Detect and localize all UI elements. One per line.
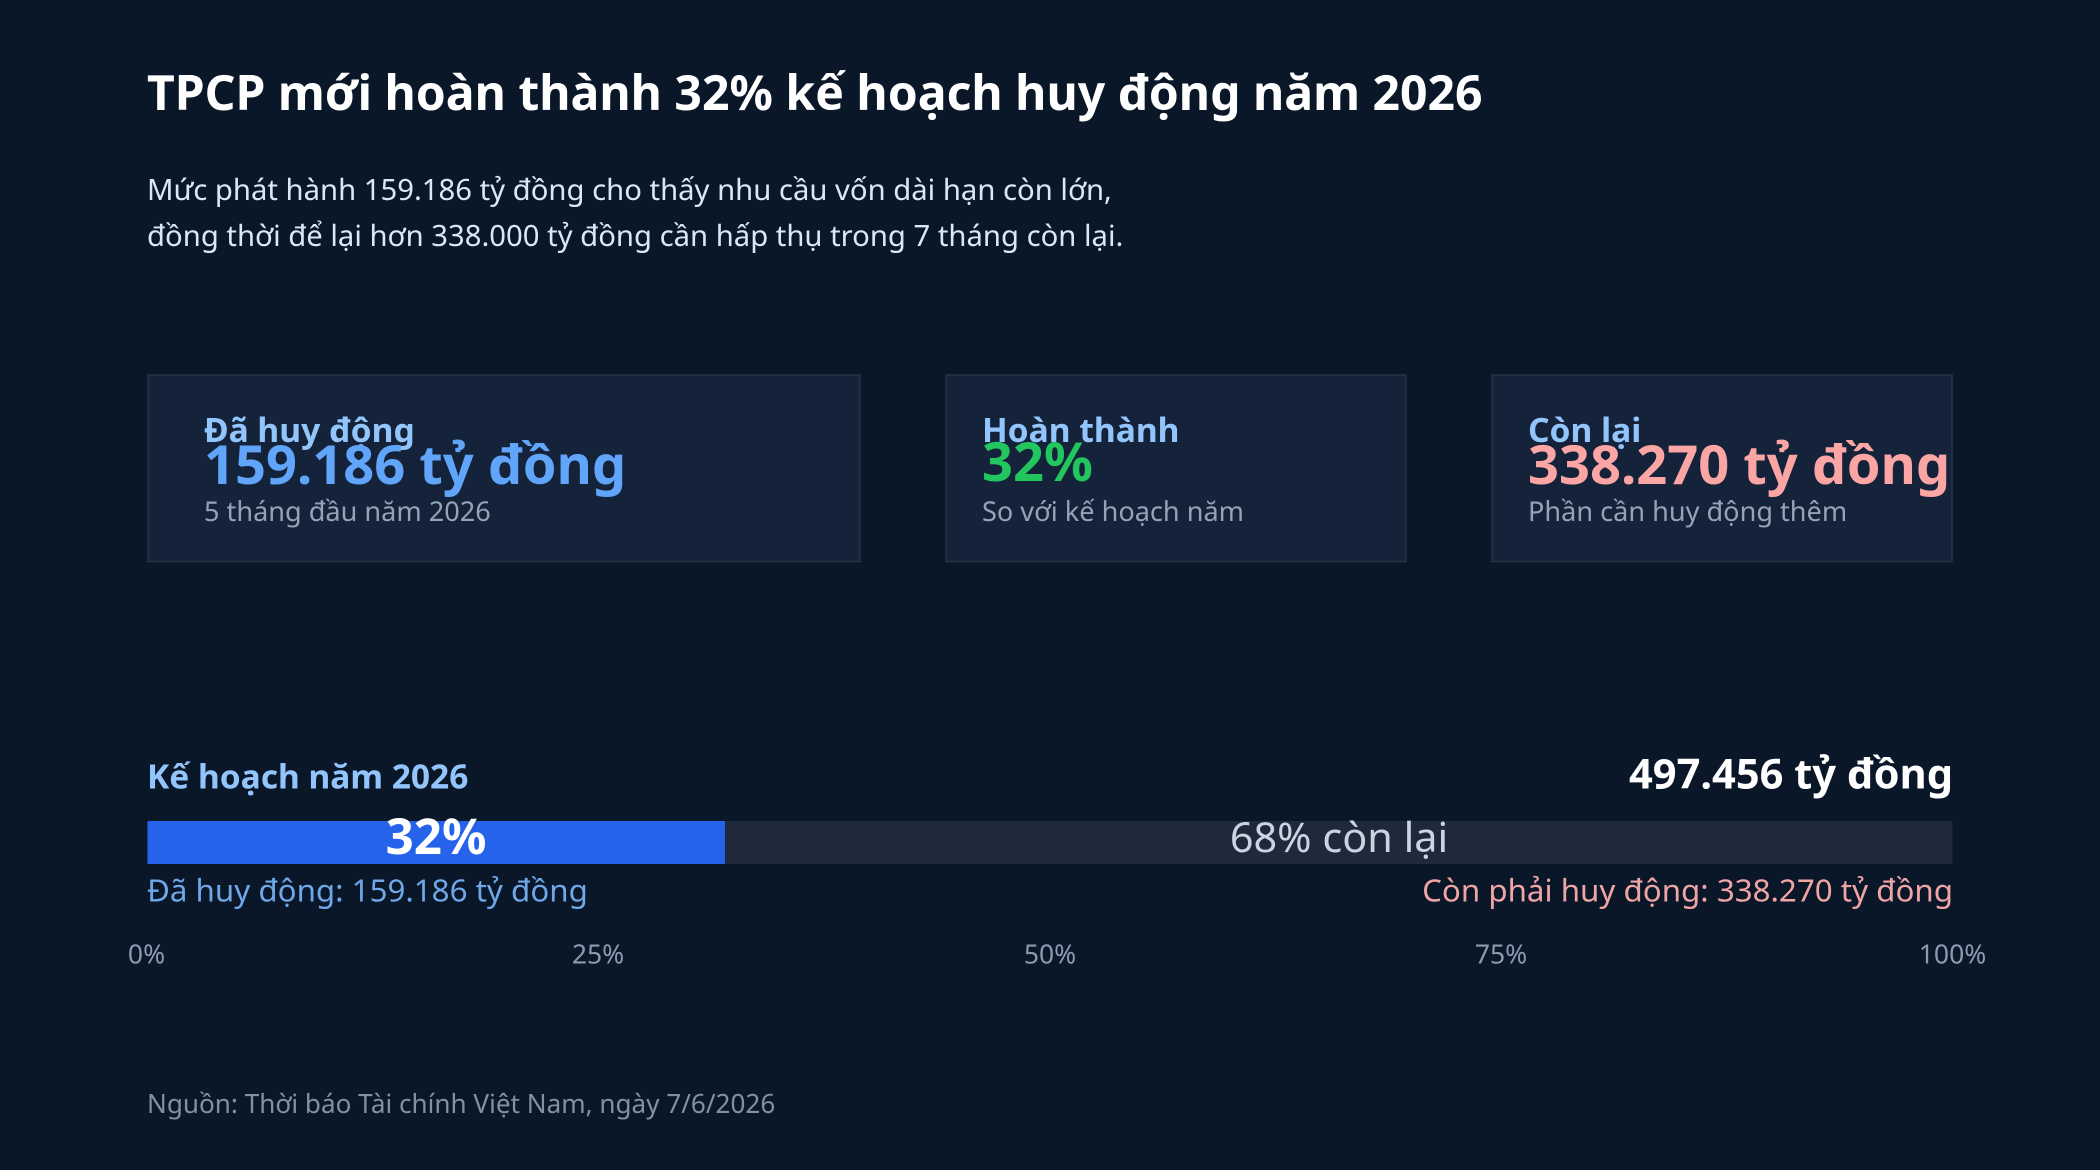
card note: mobilised: 5 tháng đầu năm 2026 (204, 492, 491, 529)
card label: remaining: Còn lại (1528, 406, 1641, 452)
source note: Nguồn: Thời báo Tài chính Việt Nam, ngày 7/6/2026 (147, 1085, 775, 1121)
axis ticks (128, 936, 1986, 972)
bar label: completed: 32% (386, 802, 486, 869)
progress bar chart (148, 802, 1952, 869)
panel: mobilised card (148, 375, 860, 562)
subtitle text block (147, 169, 1123, 255)
progress heading: plan label: Kế hoạch năm 2026 (147, 752, 468, 798)
axis ticks: 50% (1024, 936, 1076, 972)
card value: mobilised: 159.186 tỷ đồng (204, 426, 626, 500)
bar caption: remaining: Còn phải huy động: 338.270 tỷ đồng (1422, 870, 1953, 912)
subtitle text block: Mức phát hành 159.186 tỷ đồng cho thấy nhu cầu vốn dài hạn còn lớn, (147, 169, 1112, 209)
panel: completion card (946, 375, 1406, 562)
card note: remaining: Phần cần huy động thêm (1528, 492, 1847, 529)
card label: completion: Hoàn thành (982, 406, 1180, 452)
bar label: remaining: 68% còn lại (1230, 809, 1448, 865)
bar caption: mobilised: Đã huy động: 159.186 tỷ đồng (147, 870, 588, 912)
card note: completion: So với kế hoạch năm (982, 492, 1244, 529)
card value: completion: 32% (982, 423, 1093, 497)
axis ticks: 0% (128, 936, 165, 972)
subtitle text block: đồng thời để lại hơn 338.000 tỷ đồng cần hấp thụ trong 7 tháng còn lại. (147, 215, 1123, 255)
progress heading: plan total: 497.456 tỷ đồng (1629, 746, 1953, 802)
card value: remaining: 338.270 tỷ đồng (1528, 426, 1950, 500)
title: TPCP mới hoàn thành 32% kế hoạch huy động năm 2026 (147, 60, 1483, 125)
card label: mobilised: Đã huy động (204, 406, 415, 452)
axis ticks: 100% (1919, 936, 1986, 972)
axis ticks: 75% (1475, 936, 1527, 972)
panel: remaining card (1492, 375, 1952, 562)
axis ticks: 25% (572, 936, 624, 972)
